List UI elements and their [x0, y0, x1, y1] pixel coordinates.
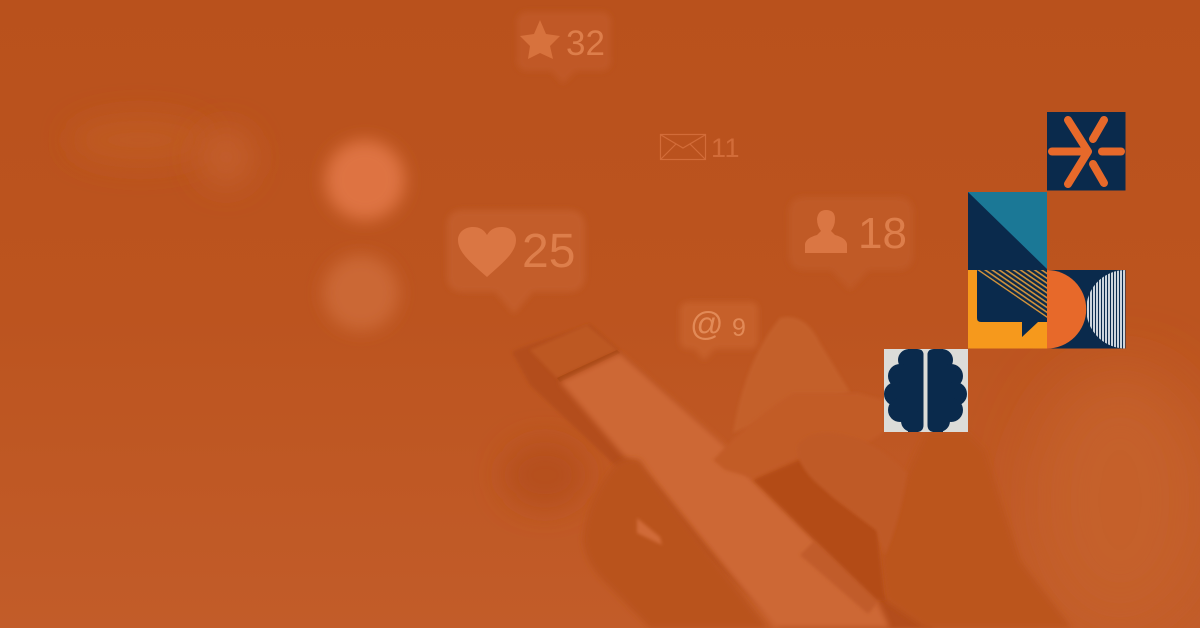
tile: brain icon — [884, 349, 968, 432]
notification: star 32: 32 — [566, 24, 605, 63]
notification: star 32 — [517, 12, 611, 84]
notification: person 18: 18 — [858, 209, 907, 258]
notification: at 9: @ — [690, 305, 724, 342]
notification: person 18 — [789, 197, 913, 290]
notification: at 9 — [680, 302, 758, 360]
tile: teal triangle — [968, 192, 1047, 270]
right hand — [713, 317, 1072, 628]
tile: speech bubble — [968, 270, 1047, 348]
smartphone — [512, 324, 935, 628]
bokeh lights — [323, 140, 405, 331]
notification: at 9: 9 — [732, 314, 746, 342]
hand holding phone — [583, 459, 767, 628]
tile: spark icon — [1047, 112, 1126, 190]
notification: heart 25: 25 — [522, 225, 575, 278]
tile: half circles — [1047, 270, 1126, 349]
notification: heart 25 — [447, 210, 585, 314]
notification: mail 11: 11 — [711, 133, 740, 163]
notification: mail 11 — [660, 133, 740, 163]
